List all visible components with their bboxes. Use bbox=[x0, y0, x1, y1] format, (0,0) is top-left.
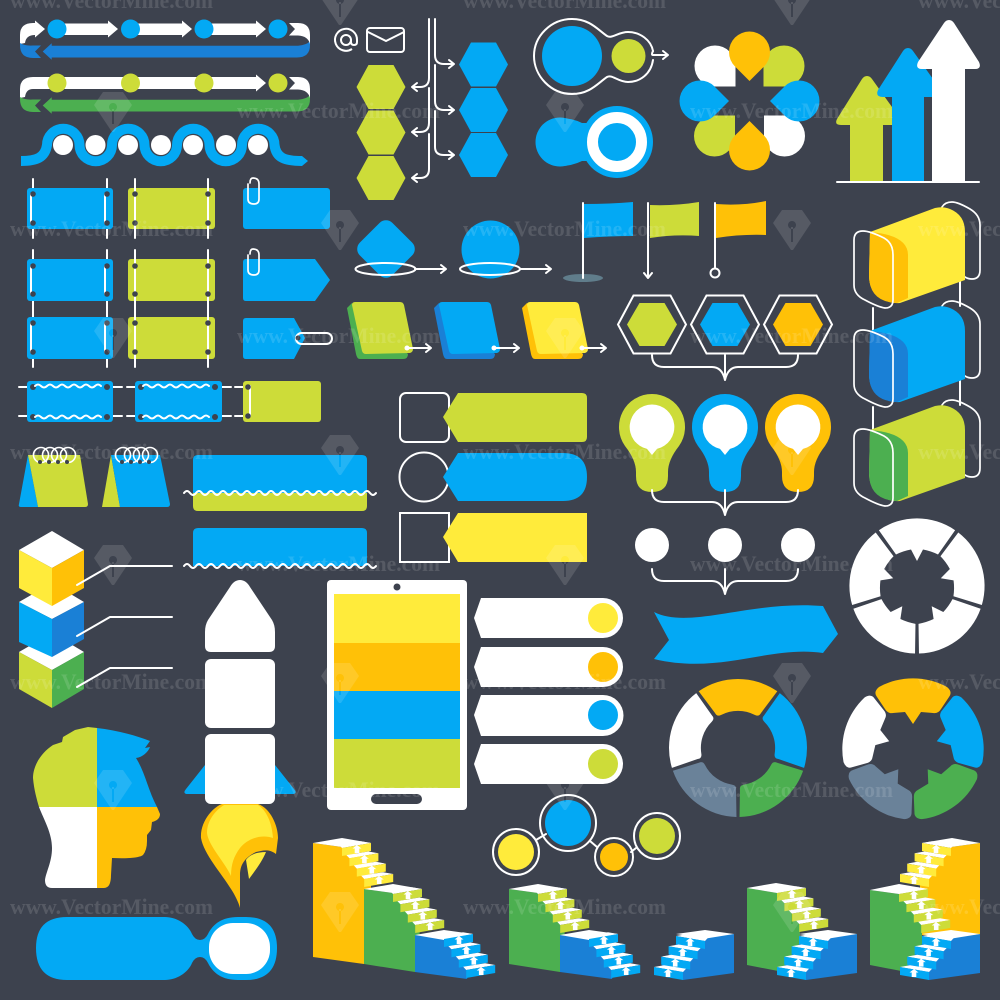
staircase large bbox=[313, 838, 495, 979]
stacked note lime bbox=[347, 302, 431, 359]
staircase small blue bbox=[654, 930, 734, 980]
watermarks: www.VectorMine.com bbox=[237, 777, 440, 802]
branching arrows bbox=[412, 19, 454, 182]
outlined hexagons with bracket bbox=[618, 296, 832, 380]
chain of blocks bbox=[854, 202, 980, 506]
laced blue cards, rows 2 and 3 bbox=[27, 250, 113, 367]
stacked note blue bbox=[434, 302, 519, 359]
rocket bbox=[184, 580, 296, 908]
watermarks: www.VectorMine.com bbox=[237, 98, 440, 123]
arrow timeline blue bbox=[20, 20, 310, 60]
blue hexagons bbox=[459, 42, 508, 177]
watermarks: www.VectorMine.com bbox=[237, 551, 440, 576]
torn banner, blue and lime bbox=[184, 455, 376, 511]
desk calendar 1 bbox=[19, 448, 88, 507]
laced blue card, row 1 bbox=[27, 179, 113, 238]
coloured ring spiked bbox=[834, 678, 992, 828]
diamond with orbit and arrow bbox=[353, 216, 446, 282]
watermarks: www.VectorMine.com bbox=[237, 323, 440, 348]
outlined bubble pair bbox=[534, 19, 668, 94]
white pill labels with dots bbox=[474, 598, 624, 784]
laced lime cards, rows 2 and 3 bbox=[128, 250, 215, 367]
stitched lime card bbox=[235, 381, 321, 422]
teardrop flower bbox=[680, 32, 819, 170]
blue label with circle bbox=[400, 452, 587, 502]
staircase two tiers bbox=[509, 884, 640, 979]
stitched blue card 1 bbox=[19, 381, 122, 422]
at sign icon bbox=[335, 29, 357, 51]
amber flag bbox=[710, 201, 766, 278]
lime label with rounded square bbox=[400, 393, 587, 442]
stacked note yellow bbox=[522, 302, 606, 359]
circle with orbit and arrow bbox=[460, 220, 551, 278]
growth arrows bbox=[836, 20, 980, 182]
watermarks: www.VectorMine.com bbox=[463, 439, 666, 464]
watermarks: www.VectorMine.com bbox=[463, 669, 666, 694]
coloured ring smooth bbox=[660, 679, 816, 827]
tablet with colour bands bbox=[327, 580, 467, 810]
watermarks: www.VectorMine.com bbox=[10, 669, 213, 694]
lime hexagons bbox=[356, 65, 406, 200]
torn banner, blue bbox=[184, 528, 376, 568]
solid blue bubble with ring bbox=[536, 106, 653, 178]
desk calendar 2 bbox=[102, 448, 170, 507]
light bulbs with bracket bbox=[619, 394, 831, 515]
envelope icon bbox=[367, 28, 404, 52]
staircase three colours bbox=[870, 838, 980, 980]
watermarks: www.VectorMine.com bbox=[10, 439, 213, 464]
head with four quadrants bbox=[33, 727, 160, 888]
lime flag bbox=[644, 202, 699, 278]
watermarks: www.VectorMine.com bbox=[690, 551, 893, 576]
watermarks: www.VectorMine.com bbox=[690, 98, 893, 123]
hanging tag bbox=[243, 318, 332, 359]
arrow timeline green bbox=[20, 74, 310, 114]
connected circles network bbox=[493, 795, 680, 876]
watermarks: www.VectorMine.com bbox=[10, 216, 213, 241]
watermarks: www.VectorMine.com bbox=[690, 323, 893, 348]
laced lime card, row 1 bbox=[128, 179, 215, 238]
white circles with bracket bbox=[635, 528, 815, 594]
blue flag bbox=[563, 202, 633, 282]
staircase green and blue bbox=[747, 883, 857, 980]
wave ribbon with circles bbox=[21, 129, 308, 166]
watermarks: www.VectorMine.com bbox=[10, 894, 213, 919]
stitched blue card 2 bbox=[127, 381, 231, 422]
white segmented ring bbox=[841, 518, 993, 663]
watermarks: www.VectorMine.com bbox=[690, 777, 893, 802]
watermarks: www.VectorMine.com bbox=[463, 216, 666, 241]
paper clip card bbox=[243, 178, 330, 229]
watermarks: www.VectorMine.com bbox=[463, 894, 666, 919]
blue ribbon bbox=[654, 605, 838, 664]
yellow label with square bbox=[400, 513, 587, 562]
stacked cubes bbox=[19, 531, 172, 708]
blue capsule with window bbox=[36, 917, 277, 980]
paper clip pointer card bbox=[243, 249, 330, 301]
